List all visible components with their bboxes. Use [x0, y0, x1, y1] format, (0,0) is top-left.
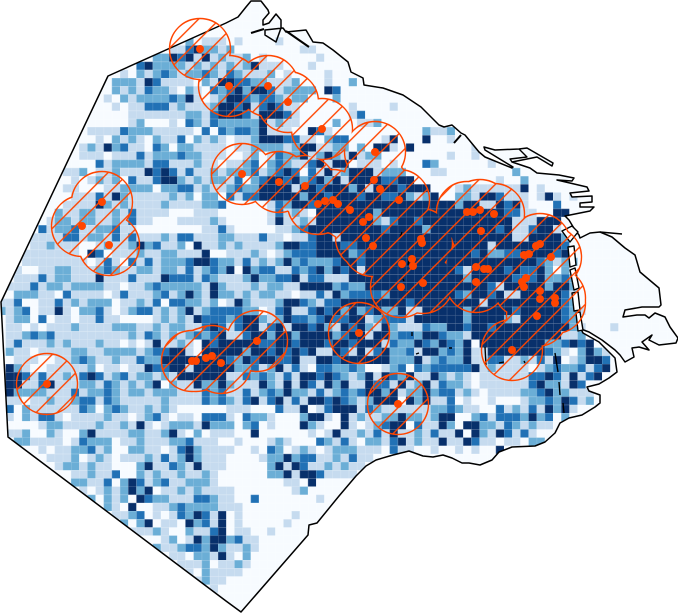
hotspot buffer outline [16, 18, 586, 436]
piers and breakwaters [251, 29, 622, 413]
hotspot points [43, 45, 559, 408]
hotspot hatch fill [18, 19, 585, 434]
